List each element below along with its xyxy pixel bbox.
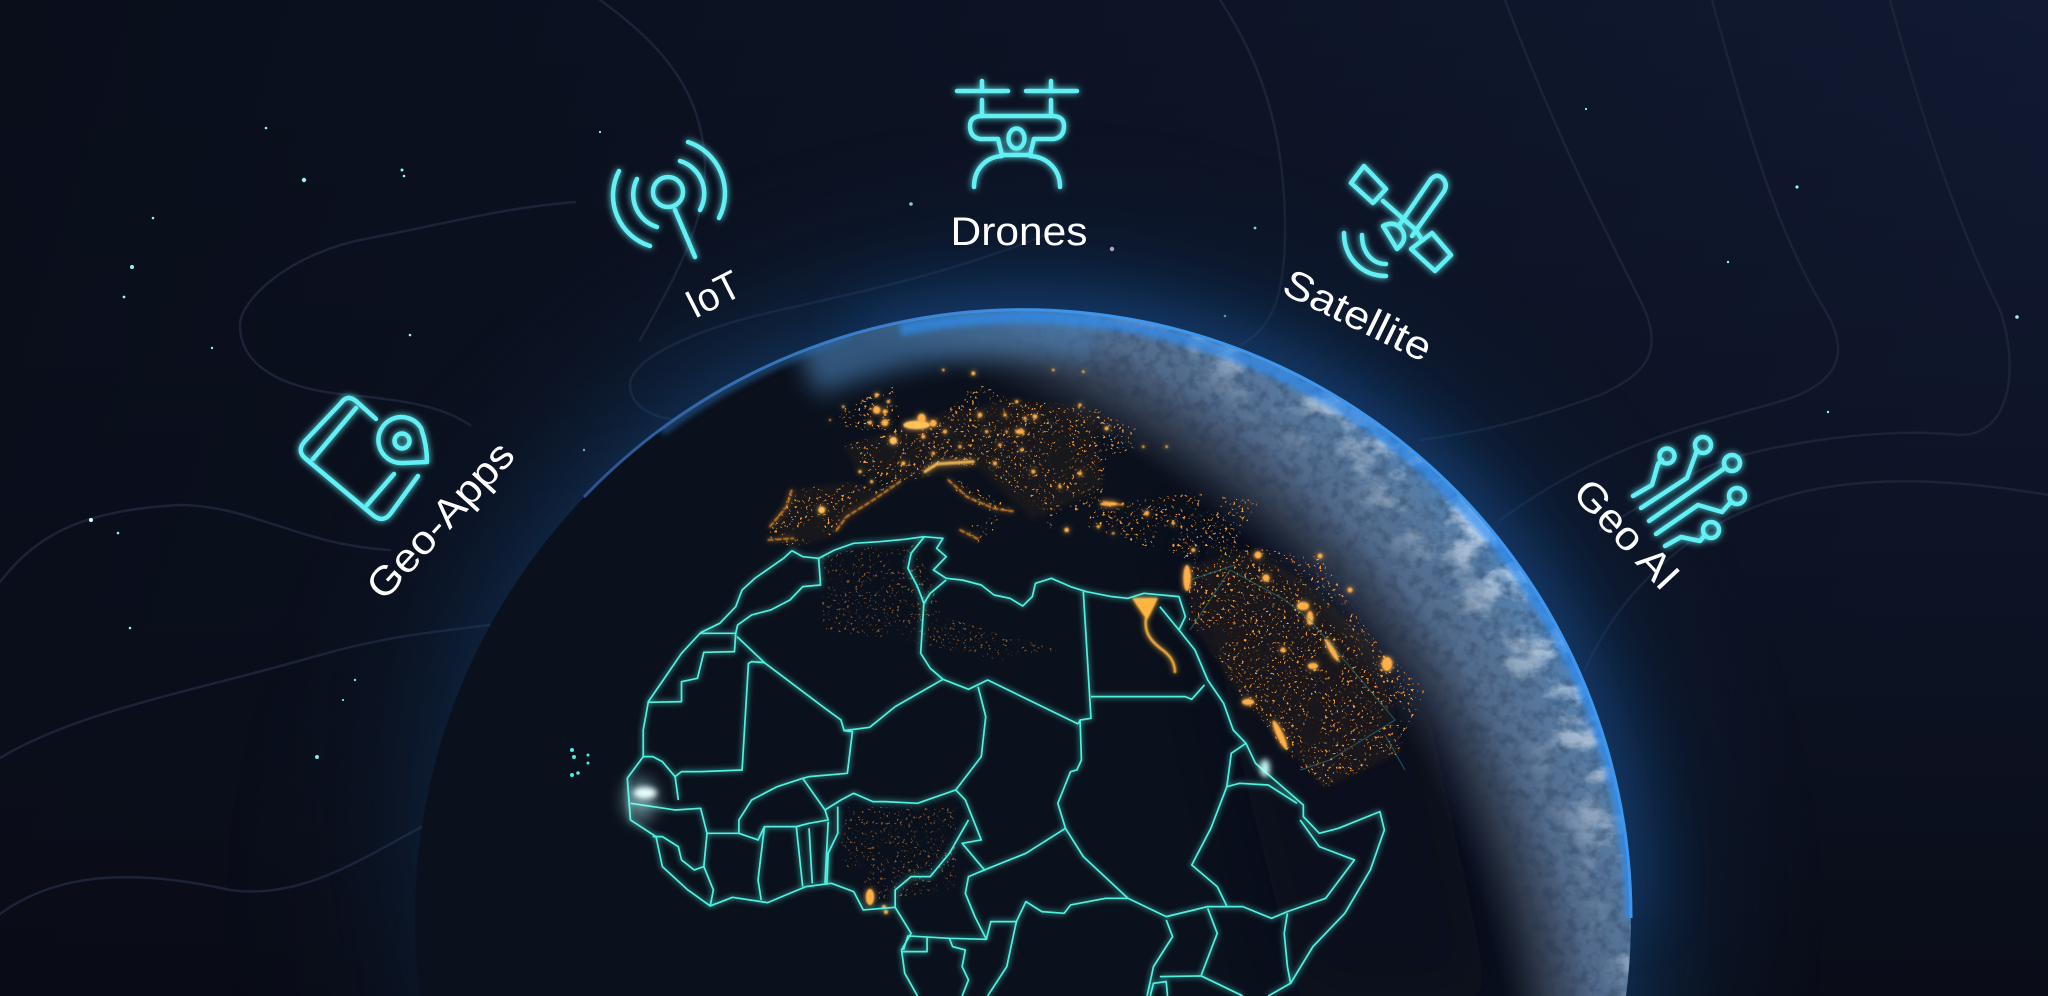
- globe: [415, 308, 1632, 996]
- label: Geo AI: Geo AI: [1564, 471, 1688, 599]
- globe: northern haze band: [800, 310, 1100, 353]
- stars: [89, 108, 2019, 759]
- globe: warm land tint under the city lights: [770, 400, 1400, 788]
- icon: Geo AI circuit: [1633, 437, 1745, 546]
- globe: Arabian shadow wedge: [1382, 653, 1442, 752]
- globe: scattered city lights North Africa and Nigeria: [820, 540, 1060, 910]
- globe: inner limb glow: [900, 317, 1631, 918]
- icon: Satellite: [1344, 166, 1451, 276]
- label: Geo-Apps: Geo-Apps: [358, 433, 523, 608]
- globe: bright city clusters Middle East and Nile: [866, 502, 1392, 914]
- label: Satellite: Satellite: [1276, 261, 1439, 371]
- globe: daylight crescent: [883, 311, 1631, 996]
- label: IoT: IoT: [679, 263, 748, 327]
- icon: IoT antenna with signal waves: [613, 142, 725, 257]
- Senegal and Eritrea coastal glow: [624, 759, 1270, 822]
- globe: north-west thin limb haze: [660, 335, 850, 430]
- globe: bright city clusters Europe: [768, 369, 1195, 552]
- globe: scattered city lights Europe and Middle East: [760, 370, 1440, 800]
- globe: land relief texture: [1088, 324, 1631, 996]
- globe atmosphere halo: [315, 202, 1731, 996]
- Cape Verde islands: [570, 748, 590, 777]
- label: Drones: Drones: [950, 210, 1088, 254]
- globe: cloud texture: [1092, 316, 1630, 996]
- icon: Drone: [957, 81, 1077, 187]
- globe: faint Middle East borders: [1190, 565, 1405, 770]
- icon: Geo-Apps wallet with map pin: [301, 398, 427, 519]
- Africa country borders: [627, 537, 1384, 996]
- globe: lit limb: [584, 310, 1631, 918]
